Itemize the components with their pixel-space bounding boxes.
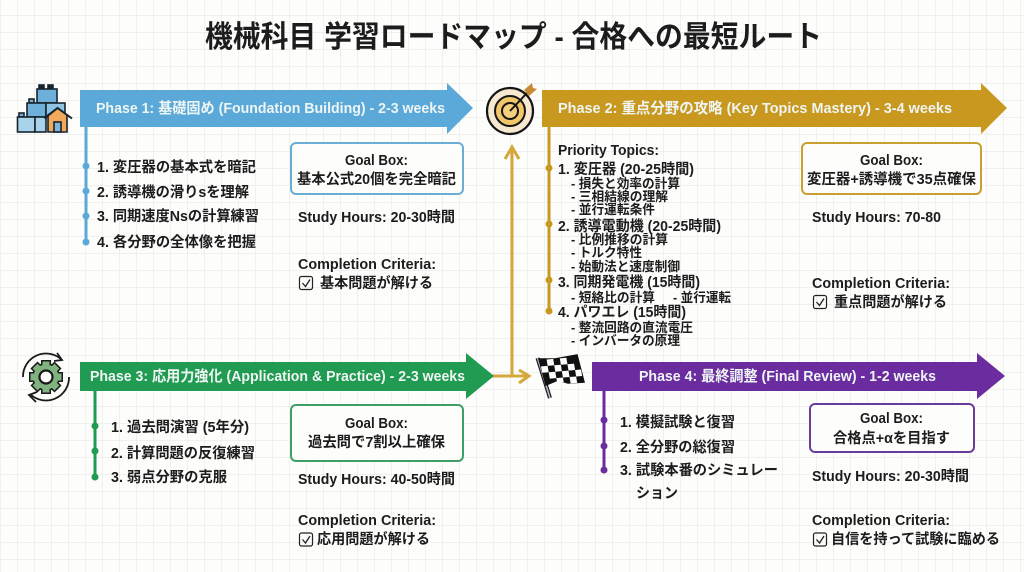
phase 2 priority topics: - 短絡比の計算 (571, 290, 655, 305)
phase 2 priority topics: - 始動法と速度制御 (571, 259, 680, 274)
phase 2 priority topics: - 並行運転 (673, 290, 731, 305)
phase 4 task list: 2. 全分野の総復習 (620, 438, 735, 456)
phase 4 completion criteria: 自信を持って試験に臨める (831, 530, 1000, 548)
phase 1 goal box: Goal Box: (345, 153, 408, 169)
phase 1 goal box: 基本公式20個を完全暗記 (297, 170, 456, 188)
phase 1 arrow (80, 83, 473, 134)
phase 4 completion criteria: Completion Criteria: (812, 513, 950, 529)
phase 3 task list: 1. 過去問演習 (5年分) (111, 418, 249, 436)
phase 2 priority topics: - 整流回路の直流電圧 (571, 320, 693, 335)
phase 2 study hours: Study Hours: 70-80 (812, 210, 941, 226)
phase 1 heading: Phase 1: 基礎固め (Foundation Building) - 2-3 weeks (96, 99, 445, 117)
phase 2 priority topics: - 損失と効率の計算 (571, 176, 680, 191)
panel: phase 2 (487, 83, 1007, 348)
phase 4 task list: 1. 模擬試験と復習 (620, 413, 735, 431)
phase 4 study hours: Study Hours: 20-30時間 (812, 468, 969, 485)
phase 1 task list: 4. 各分野の全体像を把握 (97, 233, 256, 251)
phase 2 completion criteria: 重点問題が解ける (834, 293, 947, 311)
phase 3 study hours: Study Hours: 40-50時間 (298, 471, 455, 488)
phase 4 goal box: 合格点+αを目指す (833, 429, 950, 447)
phase 2 priority topics: 3. 同期発電機 (15時間) (558, 273, 700, 291)
phase 2 priority topics (558, 143, 731, 348)
phase 3 task list: 3. 弱点分野の克服 (111, 468, 227, 486)
phase 1 completion criteria (298, 257, 436, 292)
phase 1 task list: 3. 同期速度Nsの計算練習 (97, 207, 259, 225)
phase 2 goal box: Goal Box: (860, 153, 923, 169)
panel: phase 3 (23, 353, 494, 548)
phase 4 completion criteria (812, 513, 1000, 548)
phase 4 goal box (810, 404, 974, 452)
phase 2 timeline (546, 127, 552, 314)
phase 1 completion criteria: 基本問題が解ける (320, 274, 433, 292)
title: 機械科目 学習ロードマップ - 合格への最短ルート (205, 21, 822, 54)
phase 2 heading: Phase 2: 重点分野の攻略 (Key Topics Mastery) - 3-4 weeks (558, 99, 952, 117)
icon: building blocks and house (18, 85, 72, 132)
phase 1 timeline (82, 127, 90, 246)
phase 3 goal box: 過去問で7割以上確保 (308, 434, 445, 451)
phase 3 heading: Phase 3: 応用力強化 (Application & Practice) - 2-3 weeks (90, 368, 465, 385)
phase 2 priority topics: - 並行運転条件 (571, 202, 655, 217)
phase 2 goal box: 変圧器+誘導機で35点確保 (807, 170, 976, 188)
phase 4 goal box: Goal Box: (860, 411, 923, 427)
phase 3 goal box (291, 405, 463, 461)
icon: gear with cycle arrows (23, 353, 69, 402)
icon: checkered flag (538, 355, 584, 398)
phase 3 task list (111, 418, 255, 486)
phase 2 priority topics: 4. パワエレ (15時間) (558, 304, 686, 321)
phase 1 completion criteria: Completion Criteria: (298, 257, 436, 273)
connector arrow: phase 3 to phase 2 and phase 4 (492, 147, 529, 383)
phase 3 timeline (92, 391, 98, 480)
phase 4 task list: ション (636, 486, 678, 502)
phase 1 task list: 1. 変圧器の基本式を暗記 (97, 158, 256, 176)
phase 2 completion criteria: Completion Criteria: (812, 276, 950, 292)
phase 3 completion criteria (298, 513, 436, 548)
phase 1 study hours: Study Hours: 20-30時間 (298, 209, 455, 226)
phase 3 task list: 2. 計算問題の反復練習 (111, 444, 255, 462)
phase 4 heading: Phase 4: 最終調整 (Final Review) - 1-2 weeks (639, 367, 936, 385)
phase 4 arrow (592, 353, 1005, 399)
panel: phase 1 (18, 83, 473, 292)
panel: phase 4 (538, 353, 1005, 548)
phase 2 priority topics: - 三相結線の理解 (571, 189, 668, 204)
phase 2 priority topics: - 比例推移の計算 (571, 232, 668, 247)
phase 1 task list: 2. 誘導機の滑りsを理解 (97, 183, 249, 201)
icon: target with dart (487, 83, 537, 134)
phase 2 goal box (802, 143, 981, 194)
phase 3 arrow (80, 353, 494, 399)
phase 3 goal box: Goal Box: (345, 416, 408, 432)
phase 2 priority topics: - インバータの原理 (571, 333, 680, 348)
phase 2 priority topics: 1. 変圧器 (20-25時間) (558, 161, 694, 178)
phase 2 completion criteria (812, 276, 950, 311)
phase 2 priority topics: Priority Topics: (558, 143, 659, 159)
phase 4 task list: 3. 試験本番のシミュレー (620, 462, 778, 479)
phase 3 completion criteria: 応用問題が解ける (317, 530, 430, 548)
phase 4 task list (620, 413, 778, 502)
phase 4 timeline (600, 391, 608, 474)
phase 2 priority topics: 2. 誘導電動機 (20-25時間) (558, 217, 721, 235)
phase 3 completion criteria: Completion Criteria: (298, 513, 436, 529)
phase 1 task list (97, 158, 259, 251)
phase 2 arrow (542, 83, 1007, 134)
phase 2 priority topics: - トルク特性 (571, 245, 642, 260)
phase 1 goal box (291, 143, 463, 194)
